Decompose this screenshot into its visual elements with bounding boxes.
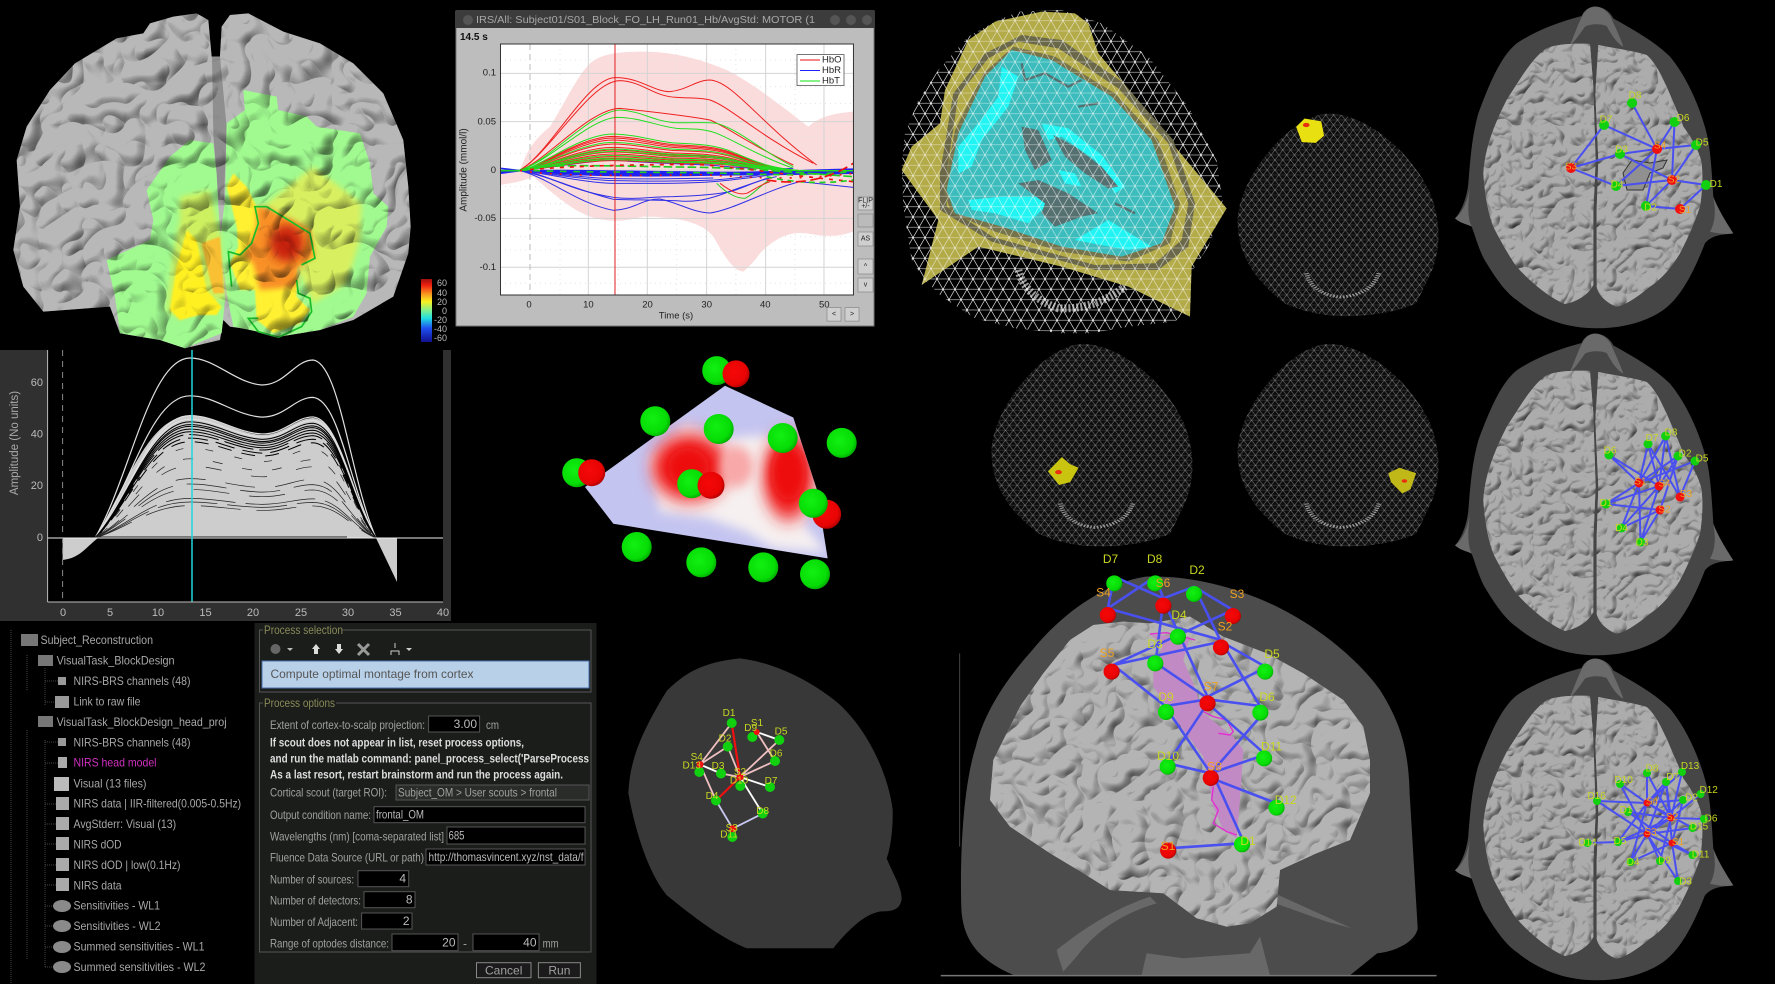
labels: D16 [1587,791,1606,802]
selected process row [262,661,589,688]
process options group [260,696,591,952]
labels [1565,90,1723,216]
process options group: Output condition name: [270,808,371,822]
tree rows: NIRS-BRS channels (48) [74,674,190,688]
panel: top view head montage 3 [1455,659,1733,980]
axis tick labels: 0.05 [478,116,496,128]
montage labels: D3 [712,761,725,772]
labels: D4 [1611,180,1624,190]
dialog background [254,623,596,984]
optodes [1566,98,1711,214]
optode labels: D3 [1147,637,1163,651]
tree rows: NIRS data | IIR-filtered(0.005-0.5Hz) [74,797,241,811]
optode labels: S3 [1230,587,1245,601]
optode spheres [562,356,857,589]
process options group: 8 [406,892,413,906]
optode labels: D11 [1261,740,1282,754]
axis ticks: 10 [152,607,164,619]
process options group: 20 [442,935,456,949]
optode labels: S4 [1096,586,1111,600]
montage links [700,723,779,829]
mesh overlay [902,12,1227,317]
dark ventricle slices [1018,127,1118,227]
tree rows: NIRS data [74,878,122,892]
slice outer ring [940,35,1195,270]
axis ticks: 5 [107,607,113,619]
process options group: 40 [523,935,537,949]
axis ticks: 25 [295,607,307,619]
axis tick labels: 0 [491,165,496,176]
montage labels: D2 [719,734,732,744]
tree rows: NIRS dOD [74,837,122,851]
optode labels: D7 [1103,552,1118,566]
head silhouette [961,577,1418,975]
montage labels: D1 [723,708,736,719]
tree rows: Sensitivities - WL1 [74,899,160,913]
window title bar [456,11,874,28]
process options group: - [463,936,467,950]
optode labels: D4 [1171,608,1187,622]
optode labels: D1 [1240,834,1256,848]
plot area [48,350,443,602]
process options group: 2 [403,914,410,928]
process options group: cm [486,718,499,732]
panel: interpolated heat map with optodes [562,356,857,589]
optode labels: S7 [1204,680,1219,694]
brain surface with activation overlay [13,13,411,348]
axis tick labels: -0.05 [474,213,496,224]
time label: 14.5 s [460,32,488,43]
cyan brain slice [947,50,1175,257]
labels: S1 [1672,837,1685,848]
optode labels: D9 [1158,690,1174,704]
process selection group: Compute optimal montage from cortex [270,667,474,681]
optode labels: S1 [1161,839,1176,853]
cancel button: Cancel [485,964,522,978]
band noise traces [500,163,853,182]
tree rows: VisualTask_BlockDesign [57,654,175,668]
labels: S3 [1680,489,1693,500]
optode labels: S8 [1207,760,1222,774]
process options group: http://thomasvincent.xyz/nst_data/f [428,850,584,864]
window title bar: IRS/All: Subject01/S01_Block_FO_LH_Run01_Hb/AvgStd: MOTOR (1 [476,14,815,26]
labels: D7 [1600,114,1613,126]
axis ticks: 35 [389,607,402,619]
axis ticks [31,377,449,619]
montage labels: D8 [756,806,770,817]
tree rows: Link to raw file [74,695,141,709]
axis ticks: 40 [437,607,449,619]
colorbar legend: 0 [442,306,447,316]
plot legend: HbO [822,54,842,66]
tree rows: NIRS head model [74,756,156,770]
process options group: Subject_OM > User scouts > frontal [398,786,557,800]
labels: D4 [1627,857,1640,868]
curves [520,78,853,213]
axis ticks: 20 [31,480,43,492]
axis tick labels: 30 [701,300,712,310]
bright lower arc of mesh [1018,270,1125,308]
plot legend: HbR [822,65,841,76]
labels [1600,428,1709,548]
labels: S2 [1668,174,1681,186]
run button [538,963,580,978]
bright white matter [958,67,1152,250]
panel: top view head montage 2 [1455,334,1733,655]
process options group: Cortical scout (target ROI): [270,786,387,800]
axis tick labels: 10 [583,300,594,310]
labels: S3 [1644,827,1657,838]
ROI contour [1623,160,1667,190]
run button: Run [548,964,570,978]
optode labels: S6 [1156,576,1171,590]
colorbar legend: 40 [437,288,447,298]
process options group: Number of detectors: [270,894,361,908]
optode links [1588,772,1704,881]
panel: wireframe head 2 [992,344,1192,546]
neck and brain [990,617,1370,975]
montage labels: D11 [720,830,738,840]
labels: D9 [1658,856,1671,866]
process options group: 3.00 [454,717,477,731]
tree rows: Summed sensitivities - WL2 [74,960,206,974]
labels: D8 [1646,764,1659,774]
labels: D5 [1696,138,1709,148]
labels: S1 [1679,205,1692,216]
labels: D3 [1679,876,1692,888]
tree rows: Summed sensitivities - WL1 [74,940,205,954]
process options group: Number of Adjacent: [270,915,358,929]
optodes [1584,768,1708,885]
head surface [628,658,902,948]
tree icons [21,634,71,973]
optodes [1602,432,1700,546]
axis tick labels: 50 [819,300,830,310]
button captions: v [864,282,868,288]
axis tick labels: 40 [760,300,771,310]
button captions: +/- [861,203,870,210]
labels: D15 [1690,822,1709,832]
process selection group: Process selection [264,623,343,637]
montage labels: D9 [744,723,758,734]
tree rows: Sensitivities - WL2 [74,919,161,933]
labels: D3 [1636,538,1649,548]
labels: D1 [1620,805,1633,816]
cancel button [476,963,531,978]
labels: S3 [1565,162,1578,172]
labels: D7 [1666,772,1679,783]
axis ticks: 20 [247,607,259,619]
optode labels: D12 [1275,793,1297,807]
chart background [0,350,451,621]
y axis label: Amplitude (No units) [9,391,21,495]
optode links [1606,436,1695,542]
optode labels: D8 [1147,552,1163,566]
line plot [500,44,853,295]
heat map surface [585,386,828,558]
montage labels: D6 [770,748,783,760]
axis tick labels [458,68,830,322]
labels: S4 [1658,478,1671,490]
panel: cortex activation map [13,13,447,348]
tree rows: NIRS dOD | low(0.1Hz) [74,858,180,872]
panel: top view head montage 1 [1455,7,1733,328]
process options group: Wavelengths (nm) [coma-separated list] [270,830,444,844]
optode labels: S2 [1218,620,1233,634]
axis tick labels: 0.1 [483,68,496,78]
labels: D12 [1700,785,1718,796]
process options group: frontal_OM [376,808,424,822]
panel: wireframe head with MRI slices [902,10,1227,333]
gray signal area [63,358,397,582]
button captions [832,198,873,318]
montage labels: D10 [730,776,749,786]
labels: D2 [1679,448,1692,460]
button captions: > [850,311,854,318]
colorbar legend [421,278,447,343]
button captions: AS [861,236,870,242]
labels: D5 [1696,454,1709,464]
labels: D2 [1685,792,1698,804]
labels: D1 [1600,498,1613,509]
optode links [1571,103,1706,209]
axis ticks: 60 [31,377,43,389]
labels: D4 [1615,523,1628,534]
montage labels: D13 [683,760,701,771]
panel: large head with brain and montage [941,552,1437,976]
optode labels: D10 [1157,749,1179,763]
montage labels: S2 [734,767,747,778]
panel: HbO HbR HbT time series window [456,11,874,326]
labels: S2 [1658,504,1671,516]
yellow slice bands [902,12,1227,317]
process options group: mm [543,936,559,950]
plot legend: HbT [822,76,840,86]
labels: D11 [1692,850,1710,860]
dense central band [520,168,853,177]
process options group: Process options [264,696,335,710]
toolbar icons [270,643,412,655]
inner olive ring [943,47,1180,262]
labels: S4 [1646,796,1659,808]
labels: D8 [1665,428,1678,438]
colorbar legend: 60 [437,278,447,288]
montage labels: D4 [706,791,719,802]
inner yellow ring [947,42,1188,265]
tree rows: VisualTask_BlockDesign_head_proj [57,715,227,729]
plot legend [797,54,844,86]
process options group: 4 [399,872,406,886]
labels: D1 [1710,179,1723,190]
colorbar legend: -20 [434,315,447,325]
labels: S2 [1666,812,1679,823]
panel: process dialog [254,623,596,984]
labels: D5 [1614,836,1627,847]
panel: file tree [11,630,241,984]
window frame [456,11,874,326]
process options group: Extent of cortex-to-scalp projection: [270,718,425,732]
labels: D8 [1629,90,1642,102]
button captions: ^ [864,264,868,270]
panel: wireframe head 3 [1238,344,1438,546]
process options group: Fluence Data Source (URL or path) [270,851,424,865]
axis tick labels: Amplitude (mmol/l) [458,128,470,212]
optode labels [1096,552,1297,853]
labels: D7 [1646,433,1659,444]
labels: D6 [1677,113,1690,124]
labels: S1 [1634,476,1647,488]
process options group: and run the matlab command: panel_process_select('ParseProcess [270,752,589,766]
axis ticks: 30 [342,607,354,619]
colorbar legend: -40 [434,324,447,334]
process options group: Range of optodes distance: [270,936,389,950]
axis ticks: 0 [37,532,43,544]
optode labels: D2 [1189,563,1205,577]
labels [1578,761,1718,888]
tree connectors [11,630,58,984]
labels: D3 [1615,144,1628,156]
labels: D2 [1644,202,1657,214]
colorbar legend: 20 [437,297,447,307]
labels: D10 [1614,775,1633,786]
labels: D13 [1681,761,1700,772]
head mesh [902,10,1223,333]
montage labels: S1 [751,718,764,729]
process selection group [260,623,591,692]
process options group: Number of sources: [270,872,354,886]
axis ticks: 0 [60,607,66,619]
time cursor line [191,350,193,602]
montage optodes [694,718,784,842]
axis ticks: 40 [31,428,43,440]
tree rows: NIRS-BRS channels (48) [74,735,190,749]
optode labels: D5 [1264,647,1280,661]
process options group: As a last resort, restart brainstorm and run the process again. [270,767,563,781]
montage labels: D5 [775,726,788,738]
labels: S4 [1654,140,1667,152]
optode labels: S5 [1100,646,1115,660]
panel: wireframe head 1 [1238,114,1438,316]
button captions: < [832,311,836,318]
button captions: FLIP [858,198,873,204]
tree rows: Subject_Reconstruction [40,633,153,647]
montage labels [683,708,788,840]
process options group: If scout does not appear in list, reset process options, [270,736,524,750]
tree rows [40,633,241,974]
window side buttons [827,197,873,321]
montage links and optodes [941,575,1437,976]
montage labels: S4 [691,752,703,763]
montage labels: S3 [726,823,738,834]
labels: D6 [1705,814,1718,824]
montage labels: D7 [765,776,778,787]
axis tick labels: 20 [642,300,653,310]
panel: gray amplitude time series [0,350,451,621]
axis tick labels: Time (s) [659,310,693,322]
axis ticks: 15 [199,607,212,619]
tree rows: Visual (13 files) [74,776,146,790]
axis tick labels: -0.1 [480,262,496,273]
panel: dark head with montage [628,658,902,948]
axis tick labels: 0 [526,300,532,310]
tree rows: AvgStderr: Visual (13) [74,817,176,831]
labels: D6 [1604,446,1617,456]
colorbar legend: -60 [434,333,447,343]
labels: D14 [1578,838,1597,848]
optode labels: D6 [1259,690,1275,704]
process options group: 685 [448,828,465,842]
